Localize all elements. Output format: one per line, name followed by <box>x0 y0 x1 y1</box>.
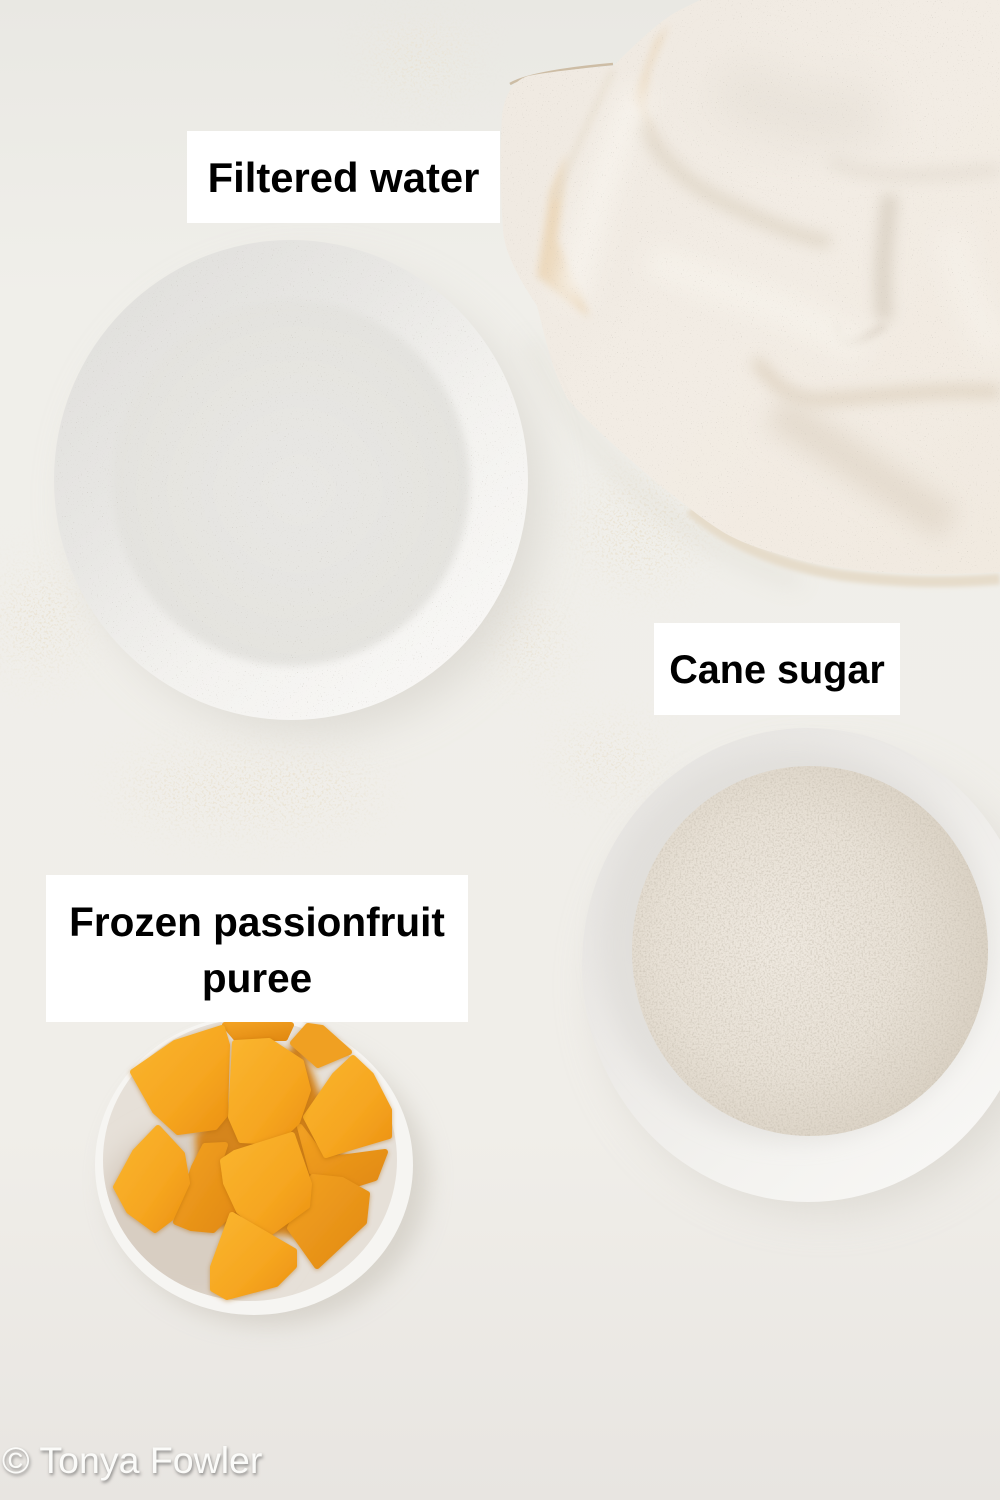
label: cane sugar: Cane sugar <box>669 648 885 692</box>
label: frozen passionfruit puree: puree <box>202 955 312 1001</box>
label: filtered water: Filtered water <box>208 154 479 201</box>
label: frozen passionfruit puree: Frozen passionfruit <box>69 899 445 945</box>
label: filtered water <box>187 131 500 223</box>
cloth napkin <box>500 0 1000 590</box>
bowl: cane sugar <box>582 728 1000 1210</box>
label: cane sugar <box>654 623 900 715</box>
label: frozen passionfruit puree <box>46 875 468 1022</box>
frozen fruit cubes <box>116 1025 389 1297</box>
watermark: © Tonya Fowler <box>2 1439 262 1481</box>
bowl: filtered water <box>54 240 542 732</box>
countertop marks <box>0 29 699 834</box>
bowl: frozen passionfruit puree <box>95 1015 428 1325</box>
